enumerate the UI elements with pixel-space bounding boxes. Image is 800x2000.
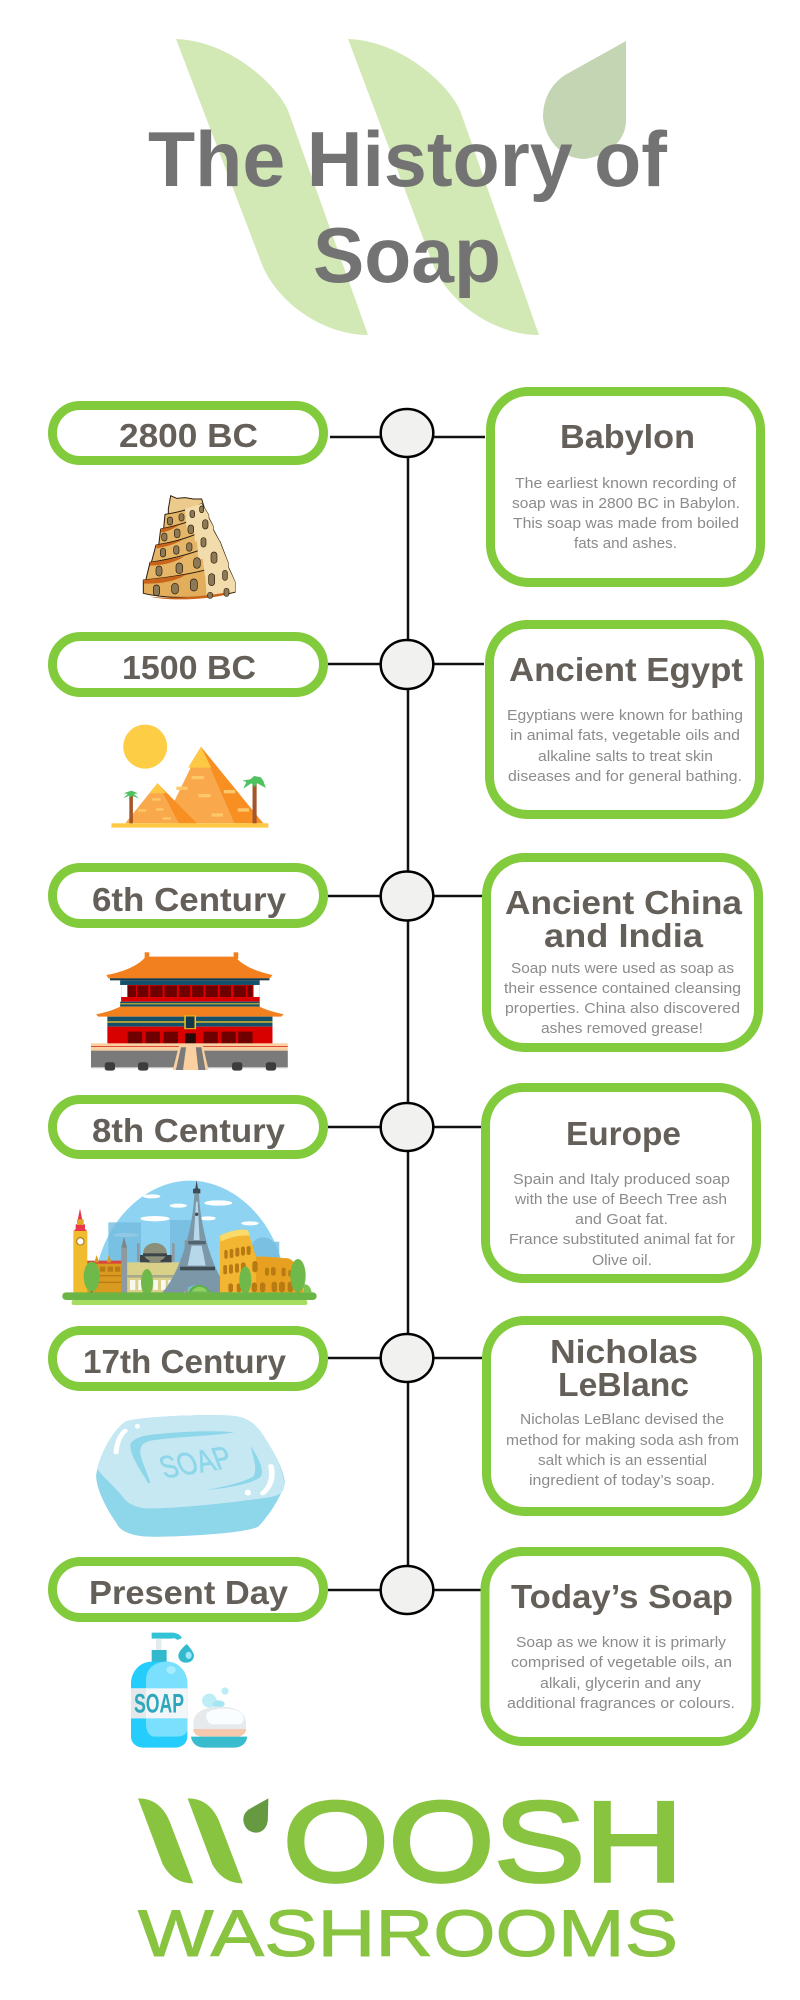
node bbox=[381, 409, 433, 457]
body text: Soap nuts were used as soap as bbox=[511, 960, 734, 977]
background logo watermark bbox=[176, 39, 626, 335]
icon: European landmarks bbox=[62, 1180, 317, 1305]
panel: Ancient China and India bbox=[486, 858, 758, 1048]
body text: alkali, glycerin and any bbox=[540, 1675, 702, 1692]
timeline spine bbox=[407, 457, 409, 1566]
icon: soap bar: SOAP bbox=[154, 1440, 237, 1486]
heading bbox=[550, 1333, 698, 1403]
heading bbox=[505, 884, 743, 954]
icon: pyramids and sun bbox=[111, 725, 268, 828]
sub wordmark: WASHROOMS bbox=[138, 1896, 678, 1970]
body text: Nicholas LeBlanc devised the bbox=[520, 1411, 724, 1428]
date pill: Present Day bbox=[89, 1574, 289, 1611]
panel: Ancient Egypt bbox=[490, 624, 760, 814]
timeline row: 6th Century bbox=[52, 868, 483, 924]
body text: with the use of Beech Tree ash bbox=[514, 1191, 727, 1208]
footer logo: Woosh Washrooms bbox=[138, 1779, 683, 1970]
timeline row: 17th Century bbox=[52, 1330, 482, 1386]
heading: LeBlanc bbox=[558, 1366, 689, 1403]
date pill bbox=[52, 1562, 324, 1618]
date pill: 2800 BC bbox=[119, 417, 258, 454]
logo mark bbox=[138, 1798, 268, 1883]
body text bbox=[509, 1171, 735, 1269]
body text: salt which is an essential bbox=[538, 1452, 707, 1469]
heading: Europe bbox=[566, 1115, 681, 1152]
date pill: 17th Century bbox=[83, 1343, 287, 1380]
body text: Soap as we know it is primarly bbox=[516, 1634, 727, 1651]
heading: Today’s Soap bbox=[511, 1578, 733, 1615]
panel: Today's Soap bbox=[485, 1552, 756, 1742]
icon: Tower of Babel bbox=[143, 496, 235, 599]
date pill bbox=[52, 636, 324, 692]
heading: Ancient Egypt bbox=[509, 651, 743, 688]
node bbox=[381, 1566, 433, 1614]
body text bbox=[512, 475, 740, 552]
heading: Ancient China bbox=[505, 884, 743, 921]
timeline row: 8th Century bbox=[52, 1100, 482, 1154]
body text: comprised of vegetable oils, an bbox=[511, 1654, 732, 1671]
heading: and India bbox=[544, 917, 704, 954]
body text: This soap was made from boiled bbox=[513, 515, 739, 532]
icon: soap bar bbox=[96, 1415, 285, 1537]
node bbox=[381, 640, 433, 689]
body text: Olive oil. bbox=[592, 1252, 652, 1269]
body text: alkaline salts to treat skin bbox=[538, 748, 713, 765]
panel: Babylon bbox=[490, 392, 760, 582]
title bbox=[148, 115, 668, 299]
body text: France substituted animal fat for bbox=[509, 1231, 735, 1248]
title: The History of bbox=[148, 115, 668, 203]
date pill: 6th Century bbox=[92, 881, 287, 918]
connector lines bbox=[328, 895, 483, 897]
icon: soap bottle and dish: SOAP bbox=[134, 1688, 184, 1718]
body text: properties. China also discovered bbox=[505, 1000, 740, 1017]
body text bbox=[506, 1411, 739, 1489]
timeline row: 1500 BC bbox=[52, 636, 484, 692]
body text: The earliest known recording of bbox=[515, 475, 737, 492]
node bbox=[381, 1334, 433, 1382]
body text: method for making soda ash from bbox=[506, 1432, 739, 1449]
panel: Nicholas LeBlanc bbox=[486, 1320, 758, 1512]
body text: soap was in 2800 BC in Babylon. bbox=[512, 495, 740, 512]
body text bbox=[504, 960, 741, 1037]
timeline row: Present Day bbox=[52, 1562, 481, 1618]
body text bbox=[507, 1634, 735, 1712]
body text: Egyptians were known for bathing bbox=[507, 707, 743, 724]
date pill bbox=[52, 868, 324, 924]
body text: fats and ashes. bbox=[574, 535, 677, 552]
body text: ingredient of today’s soap. bbox=[529, 1472, 715, 1489]
body text: Spain and Italy produced soap bbox=[513, 1171, 730, 1188]
body text: additional fragrances or colours. bbox=[507, 1695, 735, 1712]
body text: ashes removed grease! bbox=[541, 1020, 703, 1037]
panel: Europe bbox=[486, 1088, 756, 1278]
body text: and Goat fat. bbox=[575, 1211, 668, 1228]
node bbox=[381, 1103, 433, 1151]
title: Soap bbox=[313, 211, 501, 299]
connector lines bbox=[328, 663, 484, 665]
body text bbox=[507, 707, 743, 785]
node bbox=[381, 872, 433, 920]
wordmark: OOSH bbox=[283, 1779, 683, 1906]
body text: their essence contained cleansing bbox=[504, 980, 741, 997]
icon: Chinese palace bbox=[91, 952, 288, 1071]
heading: Babylon bbox=[560, 418, 695, 455]
date pill bbox=[52, 406, 324, 460]
connector lines bbox=[328, 1126, 482, 1128]
date pill bbox=[52, 1100, 324, 1154]
heading: Nicholas bbox=[550, 1333, 698, 1370]
body text: diseases and for general bathing. bbox=[508, 768, 742, 785]
connector lines bbox=[328, 1589, 481, 1591]
date pill bbox=[52, 1330, 324, 1386]
body text: in animal fats, vegetable oils and bbox=[510, 727, 740, 744]
timeline row: 2800 BC bbox=[52, 406, 485, 460]
date pill: 1500 BC bbox=[122, 649, 256, 686]
date pill: 8th Century bbox=[92, 1112, 286, 1149]
icon: soap bottle and dish bbox=[131, 1633, 247, 1748]
connector lines bbox=[328, 1357, 482, 1359]
connector lines bbox=[330, 436, 485, 438]
